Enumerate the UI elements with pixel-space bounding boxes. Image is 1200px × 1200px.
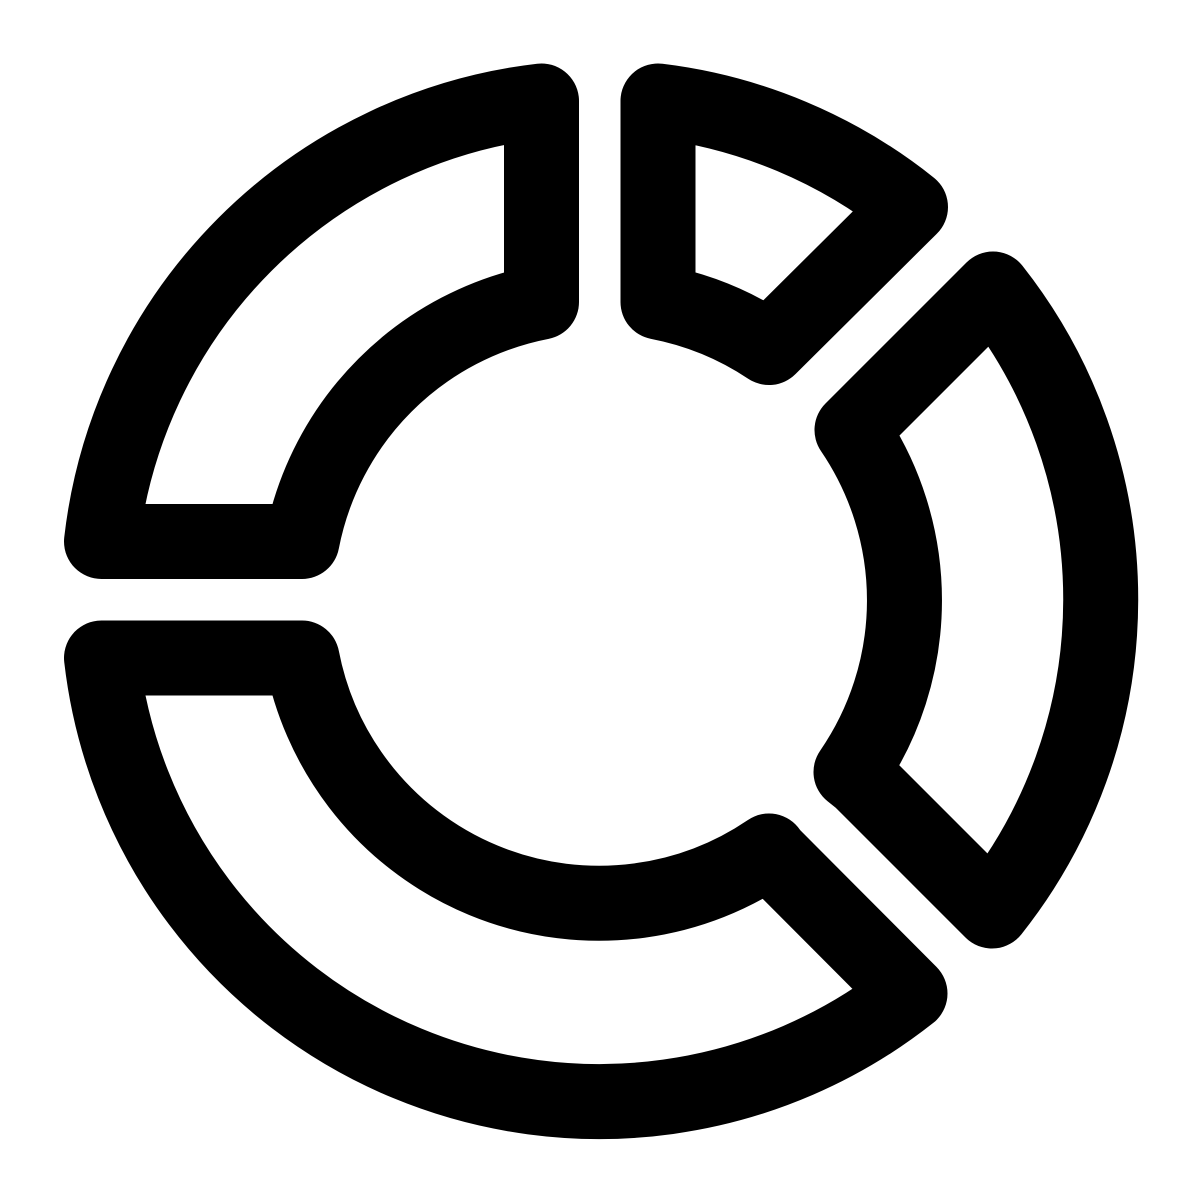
segment: right — [851, 289, 1101, 911]
segment: top left — [102, 101, 542, 542]
segment: bottom — [102, 658, 910, 1102]
segment: top right — [658, 101, 910, 348]
